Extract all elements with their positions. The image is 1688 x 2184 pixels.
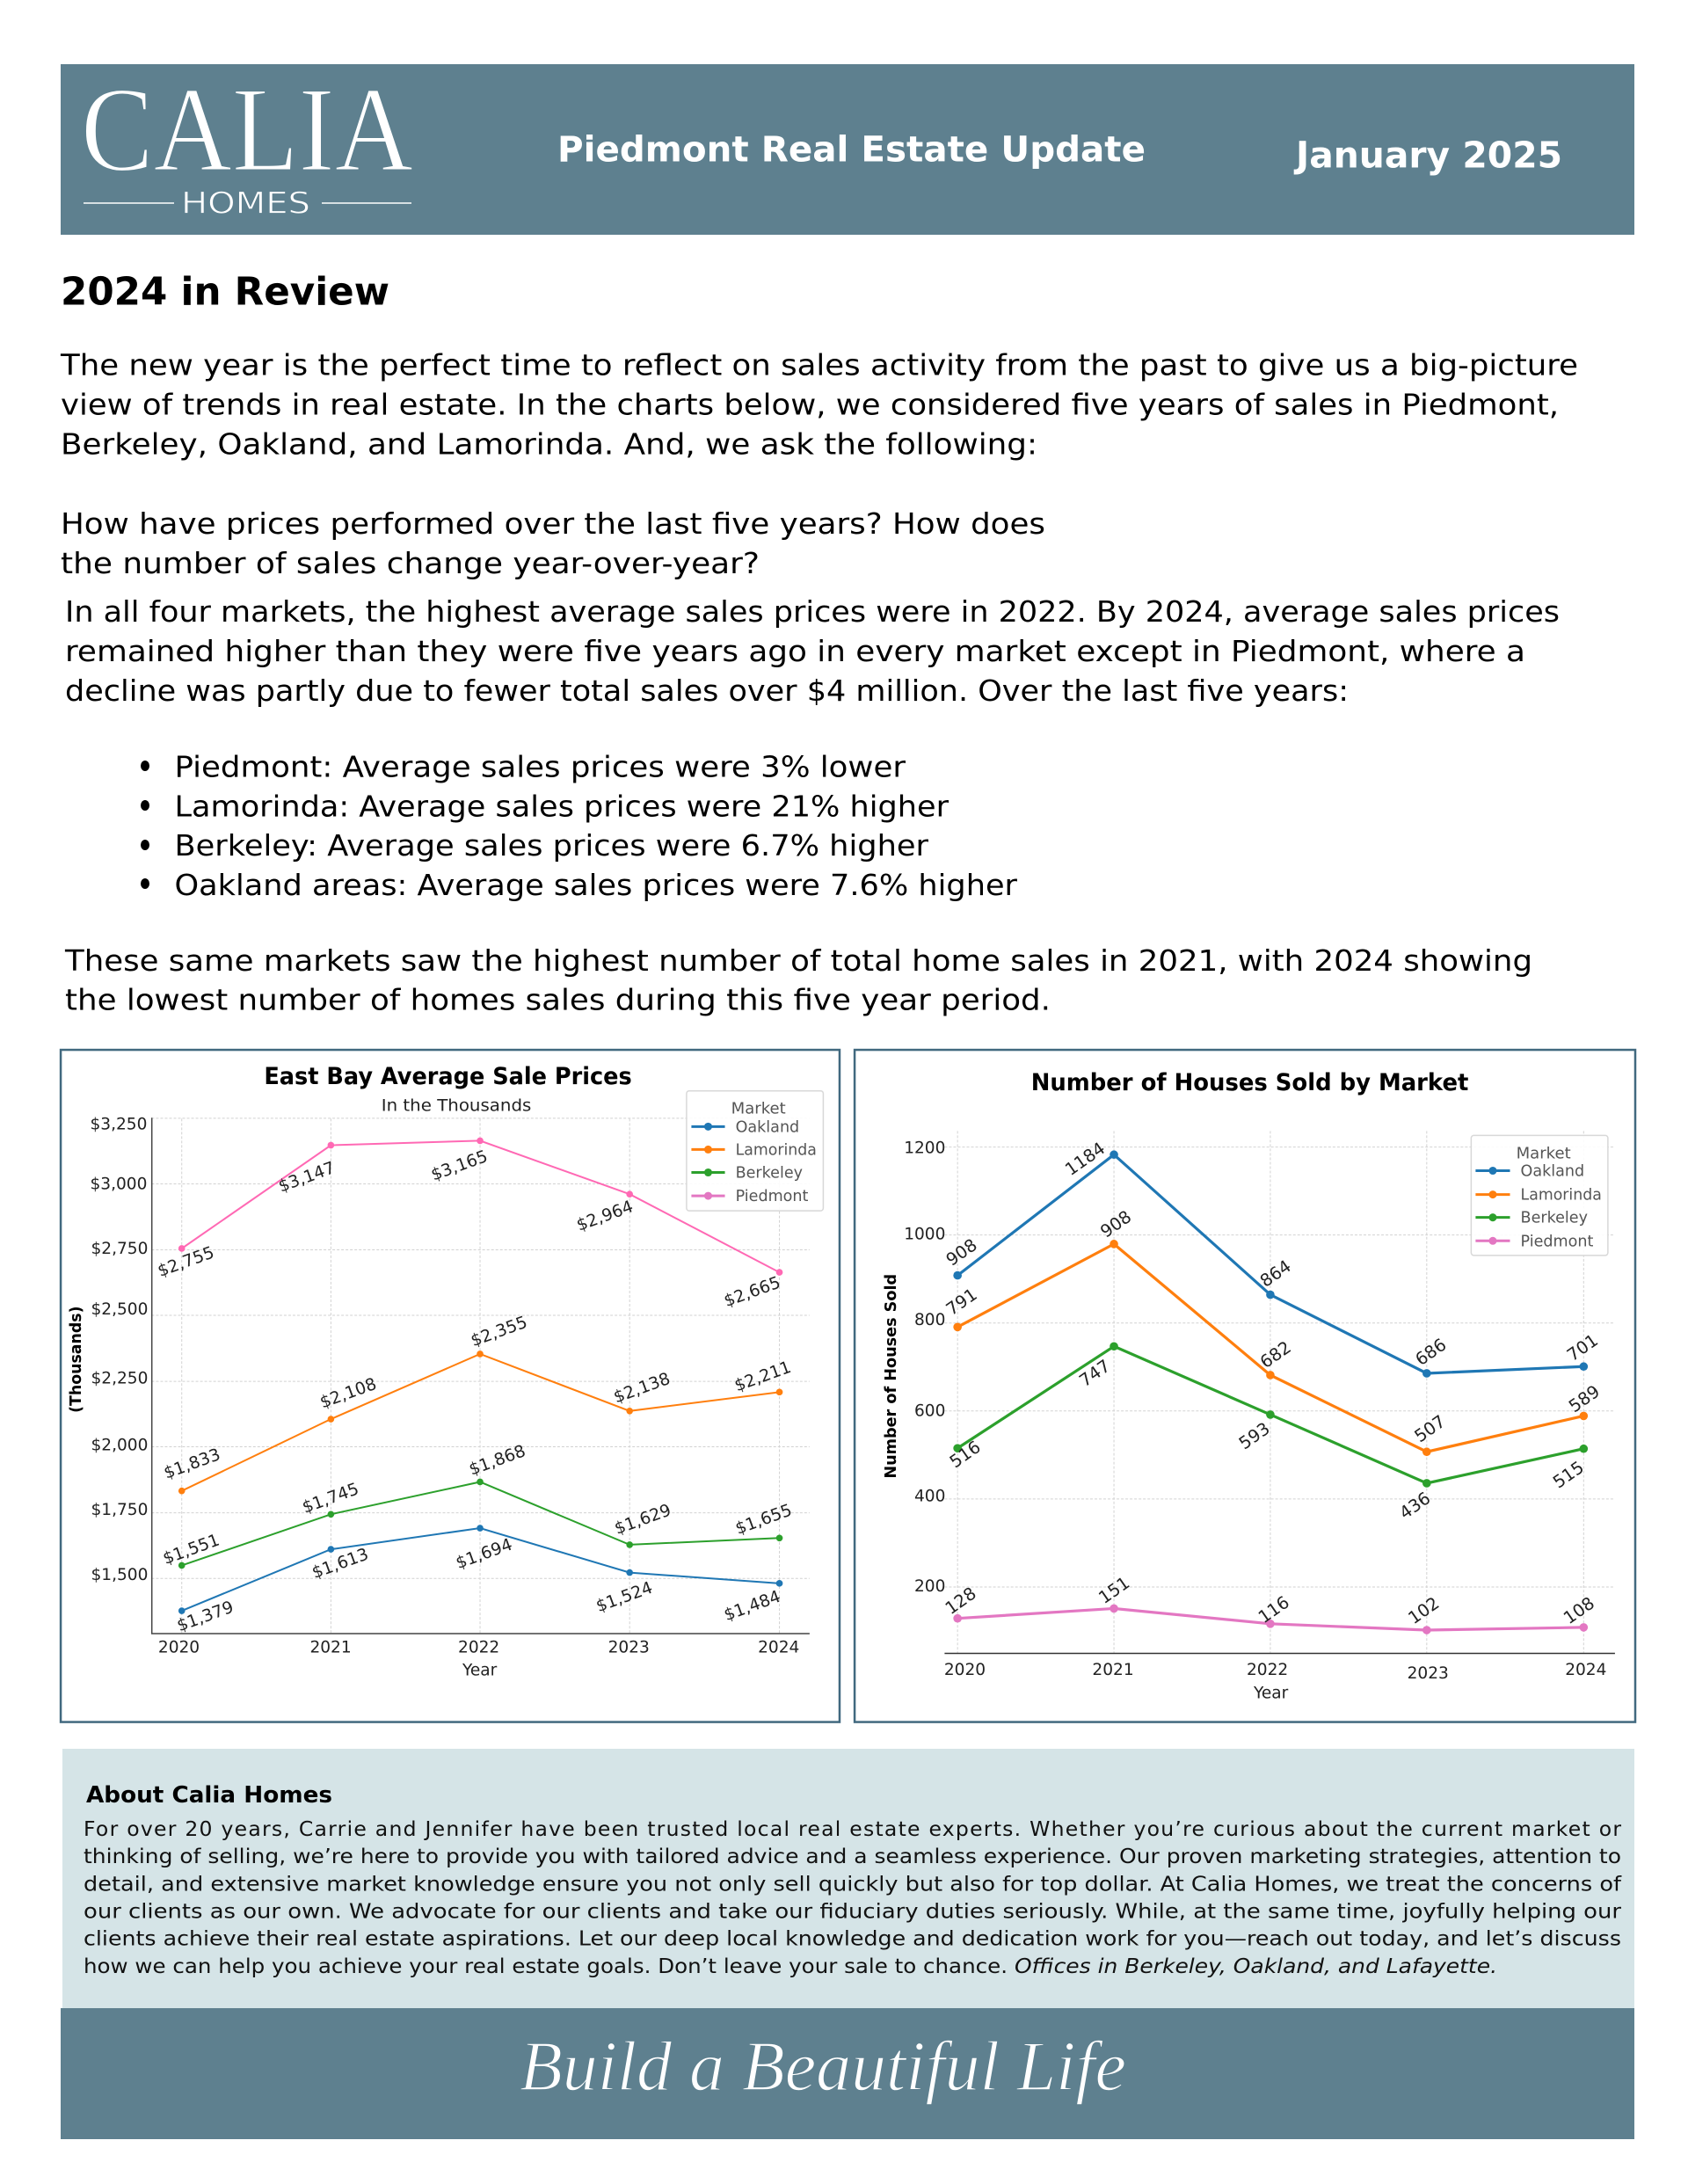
data labels: homes sold: 701 xyxy=(1563,1330,1602,1365)
panel: number of houses sold chart xyxy=(855,1050,1635,1722)
legend: markets: Lamorinda xyxy=(736,1141,817,1159)
data labels: homes sold: 108 xyxy=(1560,1593,1598,1628)
legend: markets: Piedmont xyxy=(1521,1233,1594,1250)
question text block xyxy=(61,506,1045,580)
series: Oakland prices xyxy=(178,1525,782,1614)
footer banner xyxy=(61,2008,1634,2139)
data labels: homes sold: 864 xyxy=(1256,1256,1295,1292)
series: Oakland sold xyxy=(953,1150,1588,1378)
question text block: How have prices performed over the last five years? How does xyxy=(61,506,1045,541)
data labels: homes sold: 747 xyxy=(1075,1356,1114,1391)
data labels: homes sold: 102 xyxy=(1405,1593,1443,1628)
x axis labels: 2020 xyxy=(944,1661,986,1679)
y axis labels xyxy=(90,1115,148,1584)
data labels: homes sold: 686 xyxy=(1412,1335,1450,1370)
data labels: homes sold: 791 xyxy=(942,1285,981,1320)
bullet list: market price changes xyxy=(141,749,1017,902)
data labels: homes sold: 151 xyxy=(1095,1573,1133,1608)
data labels: prices: $1,629 xyxy=(612,1500,673,1539)
x axis labels xyxy=(158,1638,799,1656)
chart title: Number of Houses Sold by Market xyxy=(1031,1069,1468,1096)
legend: markets: Oakland xyxy=(736,1118,799,1136)
y axis labels: $2,000 xyxy=(91,1437,148,1455)
legend: markets: Market xyxy=(731,1099,786,1117)
x axis labels: 2022 xyxy=(458,1638,499,1656)
data labels: homes sold: 516 xyxy=(946,1437,985,1472)
data labels: prices: $2,665 xyxy=(722,1273,783,1311)
intro text block: view of trends in real estate. In the charts below, we considered five years of sales in Piedmont, xyxy=(61,387,1559,422)
legend: markets: Oakland xyxy=(1521,1163,1584,1181)
price summary text block: decline was partly due to fewer total sales over $4 million. Over the last five years: xyxy=(65,673,1349,708)
series: Berkeley prices xyxy=(178,1479,782,1569)
series: Piedmont sold xyxy=(953,1605,1588,1634)
footer tagline: Build a Beautiful Life xyxy=(520,2028,1126,2106)
y axis labels: 200 xyxy=(914,1577,945,1596)
about body text: our clients as our own. We advocate for our clients and take our fiduciary duties seriously. While, at the same time, joyfully helping our xyxy=(84,1899,1621,1924)
home sales summary text block: the lowest number of homes sales during this five year period. xyxy=(65,983,1051,1016)
x axis labels: 2023 xyxy=(608,1638,650,1656)
data labels: prices: $2,964 xyxy=(574,1197,636,1235)
y axis labels: 800 xyxy=(914,1311,945,1329)
question text block: the number of sales change year-over-year? xyxy=(61,546,760,580)
header title: Piedmont Real Estate Update xyxy=(557,130,1146,171)
bullet list: market price changes: Piedmont: Average sales prices were 3% lower xyxy=(174,749,906,784)
data labels: prices: $1,551 xyxy=(160,1531,222,1569)
data labels: homes sold: 589 xyxy=(1565,1381,1604,1416)
x axis title: Year xyxy=(1253,1684,1289,1702)
price summary text block: remained higher than they were five years ago in every market except in Piedmont, where a xyxy=(65,634,1525,668)
y axis labels: $1,750 xyxy=(91,1501,148,1519)
x axis labels: 2024 xyxy=(1565,1661,1606,1679)
x axis labels: 2022 xyxy=(1247,1661,1288,1679)
intro text block xyxy=(60,348,1578,461)
data labels: prices: $1,524 xyxy=(593,1578,655,1616)
header date: January 2025 xyxy=(1293,134,1562,176)
y axis title: (Thousands) xyxy=(67,1307,85,1413)
legend: markets xyxy=(687,1091,823,1211)
logo: Calia Homes: HOMES xyxy=(181,186,310,222)
data labels: prices xyxy=(155,1147,795,1635)
data labels: homes sold: 507 xyxy=(1411,1411,1449,1446)
data labels: homes sold: 593 xyxy=(1235,1418,1274,1453)
price summary text block: In all four markets, the highest average sales prices were in 2022. By 2024, average sales prices xyxy=(65,594,1560,629)
legend: markets: Market xyxy=(1517,1144,1571,1162)
about body text: For over 20 years, Carrie and Jennifer have been trusted local real estate experts. Whether you’re curious about the current market or xyxy=(84,1816,1621,1841)
about body text: how we can help you achieve your real estate goals. Don’t leave your sale to chance. xyxy=(84,1954,1008,1978)
intro text block: Berkeley, Oakland, and Lamorinda. And, we ask the following: xyxy=(61,427,1037,461)
data labels: homes sold: 1184 xyxy=(1061,1138,1109,1180)
data labels: prices: $1,868 xyxy=(467,1441,528,1480)
about body text: clients achieve their real estate aspirations. Let our deep local knowledge and dedication work for you—reach out today, and let’s discuss xyxy=(84,1926,1621,1950)
data labels: prices: $1,484 xyxy=(722,1587,783,1625)
x axis labels: 2021 xyxy=(309,1638,352,1656)
data labels: prices: $2,138 xyxy=(611,1369,673,1407)
x axis title: Year xyxy=(462,1661,498,1679)
data labels: prices: $3,165 xyxy=(428,1147,491,1185)
panel: East Bay average sale prices chart xyxy=(61,1050,840,1722)
data labels: homes sold: 908 xyxy=(942,1234,981,1270)
x axis labels xyxy=(944,1661,1606,1683)
y axis labels: 1000 xyxy=(904,1226,945,1244)
y axis labels: $1,500 xyxy=(91,1566,148,1584)
logo: Calia Homes: CALIA xyxy=(81,62,413,197)
x axis labels: 2020 xyxy=(158,1638,200,1656)
y axis labels: 1200 xyxy=(904,1139,945,1157)
chart title: East Bay Average Sale Prices xyxy=(264,1063,632,1090)
legend: markets: Piedmont xyxy=(736,1188,809,1205)
data labels: homes sold: 128 xyxy=(942,1583,980,1619)
data labels: prices: $1,613 xyxy=(309,1545,371,1583)
heading: 2024 in Review: 2024 in Review xyxy=(61,269,389,315)
data labels: prices: $1,379 xyxy=(174,1598,236,1635)
x axis labels: 2021 xyxy=(1092,1661,1134,1679)
series: Lamorinda prices xyxy=(178,1350,782,1495)
data labels: prices: $1,655 xyxy=(733,1500,795,1539)
x axis labels: 2024 xyxy=(758,1638,799,1656)
data labels: homes sold: 436 xyxy=(1396,1488,1434,1524)
y axis labels: 400 xyxy=(914,1488,945,1506)
legend: markets xyxy=(1471,1135,1608,1256)
series: Lamorinda sold xyxy=(953,1240,1588,1456)
series: Piedmont prices xyxy=(178,1138,782,1276)
about body text: thinking of selling, we’re here to provide you with tailored advice and a seamless experience. Our proven marketing strategies, attention to xyxy=(84,1844,1621,1868)
y axis labels: $2,250 xyxy=(91,1369,148,1387)
about body text xyxy=(84,1816,1622,1978)
intro text block: The new year is the perfect time to reflect on sales activity from the past to give us a big-picture xyxy=(60,348,1578,382)
y axis labels: $2,750 xyxy=(91,1240,148,1258)
data labels: homes sold: 515 xyxy=(1549,1457,1588,1492)
home sales summary text block xyxy=(64,943,1532,1016)
chart subtitle: In the Thousands xyxy=(382,1096,531,1115)
header banner xyxy=(61,62,1634,235)
y axis labels: $2,500 xyxy=(91,1300,148,1319)
about heading: About Calia Homes xyxy=(86,1782,332,1809)
y axis title: Number of Houses Sold xyxy=(882,1274,900,1479)
data labels: homes sold: 682 xyxy=(1256,1337,1295,1372)
data labels: prices: $2,755 xyxy=(155,1242,217,1281)
data labels: prices: $3,147 xyxy=(276,1158,338,1197)
data labels: homes sold: 908 xyxy=(1096,1206,1135,1242)
legend: markets: Berkeley xyxy=(736,1165,803,1183)
about body text: detail, and extensive market knowledge ensure you not only sell quickly but also for top dollar. At Calia Homes, we treat the concerns of xyxy=(84,1871,1622,1896)
data labels: prices: $1,745 xyxy=(300,1479,361,1518)
data labels: homes sold xyxy=(942,1138,1604,1628)
y axis labels: $3,250 xyxy=(90,1115,147,1133)
home sales summary text block: These same markets saw the highest number of total home sales in 2021, with 2024 showing xyxy=(64,943,1532,978)
data labels: prices: $1,694 xyxy=(454,1535,515,1573)
data labels: prices: $2,211 xyxy=(732,1358,794,1395)
about body text: Offices in Berkeley, Oakland, and Lafayette. xyxy=(1015,1954,1497,1978)
price summary text block xyxy=(65,594,1560,708)
y axis labels: $3,000 xyxy=(90,1176,147,1194)
legend: markets: Berkeley xyxy=(1521,1210,1588,1227)
series: Berkeley sold xyxy=(953,1342,1588,1488)
panel: about Calia Homes xyxy=(62,1749,1634,2008)
y axis labels: 600 xyxy=(914,1401,945,1420)
legend: markets: Lamorinda xyxy=(1521,1187,1602,1205)
data labels: homes sold: 116 xyxy=(1255,1592,1293,1627)
bullet list: market price changes: Oakland areas: Average sales prices were 7.6% higher xyxy=(174,868,1017,902)
y axis labels xyxy=(904,1139,945,1596)
bullet list: market price changes: Lamorinda: Average sales prices were 21% higher xyxy=(174,790,949,823)
data labels: prices: $2,355 xyxy=(469,1313,530,1350)
bullet list: market price changes: Berkeley: Average sales prices were 6.7% higher xyxy=(174,828,928,863)
data labels: prices: $1,833 xyxy=(161,1445,223,1483)
data labels: prices: $2,108 xyxy=(317,1374,379,1412)
x axis labels: 2023 xyxy=(1408,1664,1449,1683)
